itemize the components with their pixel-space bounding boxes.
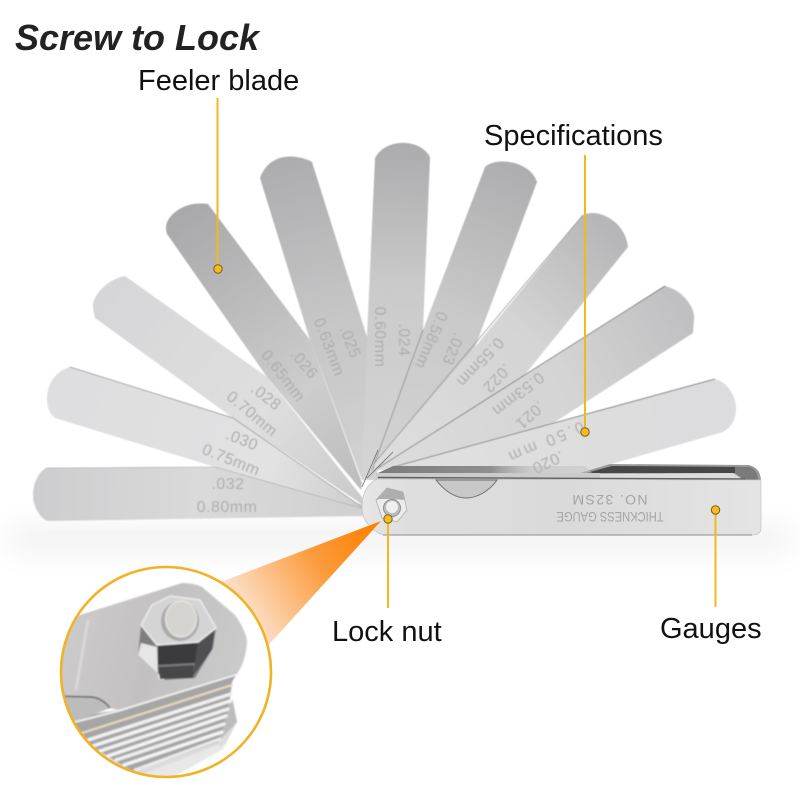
thumb notch: [436, 480, 497, 498]
blade .032: [33, 467, 364, 521]
callout: feeler blade: [138, 65, 299, 273]
inset ring: [61, 567, 271, 777]
top plate: [50, 583, 247, 710]
blade .030: [47, 367, 364, 509]
soft background shadow: [10, 526, 790, 552]
blade .020: .020: [529, 447, 566, 476]
blade .028: [93, 276, 363, 505]
inset contents: [62, 582, 266, 776]
blade .024: 0.60mm: [371, 307, 388, 367]
callout: gauges: Gauges: [660, 613, 762, 645]
blade .028: .028: [247, 380, 284, 414]
lower plate: [96, 700, 236, 774]
blade .026: 0.65mm: [257, 347, 308, 405]
blade .024: [362, 143, 430, 480]
light inner strip: [560, 473, 744, 480]
callout: specifications: Specifications: [484, 120, 663, 152]
blade .021: [378, 286, 694, 474]
blade .021: 0.53mm: [489, 368, 547, 419]
blade root shadow band: [378, 466, 592, 473]
blade stack lines: [75, 674, 238, 770]
blade .022: [372, 213, 628, 468]
callout: lock nut: [332, 515, 442, 648]
case back: [400, 464, 761, 530]
inner right wall: [735, 467, 758, 480]
blade stack: [70, 672, 238, 772]
notch: [66, 696, 110, 721]
case engraving: THICKNESS GAUGE: [556, 509, 664, 525]
zoom cone: [205, 521, 381, 660]
case engraving: [556, 492, 664, 525]
blade .022: .022: [479, 360, 514, 396]
callout: specifications: [484, 120, 663, 436]
blade .032: 0.80mm: [197, 499, 257, 516]
dark inner band: [586, 466, 745, 473]
blade .023: 0.58mm: [411, 309, 450, 371]
case engraving: NO. 32SM: [572, 492, 648, 508]
magnified lock nut inset: [60, 566, 272, 778]
blade .024: .024: [395, 323, 412, 357]
callout: gauges: [660, 506, 762, 645]
blade .025: .025: [336, 324, 363, 361]
blade .022: 0.55mm: [453, 334, 507, 390]
blade .020: [385, 379, 736, 478]
blade .020: 0.50 mm: [503, 417, 586, 466]
blade .032: .032: [211, 476, 245, 493]
blade .025: [260, 157, 378, 480]
blade .021: .021: [512, 397, 548, 432]
lock nut on case: [376, 488, 407, 522]
pivot fold lines: [362, 450, 393, 487]
blade .023: [365, 162, 537, 470]
callout: lock nut: Lock nut: [332, 616, 442, 648]
gauge case: [362, 464, 761, 535]
callout: feeler blade: Feeler blade: [138, 65, 299, 97]
blade .025: 0.63mm: [310, 316, 347, 379]
case front plate: [362, 479, 761, 535]
blade .026: [166, 204, 362, 490]
hex nut: [138, 596, 216, 680]
title: Screw to Lock: [15, 17, 261, 58]
feeler blade fan: [33, 143, 736, 521]
blade .028: 0.70mm: [223, 388, 280, 440]
blade .030: 0.75mm: [199, 441, 262, 480]
blade .026: .026: [286, 346, 321, 382]
blade .023: .023: [438, 330, 467, 367]
blade .030: .030: [223, 426, 260, 455]
